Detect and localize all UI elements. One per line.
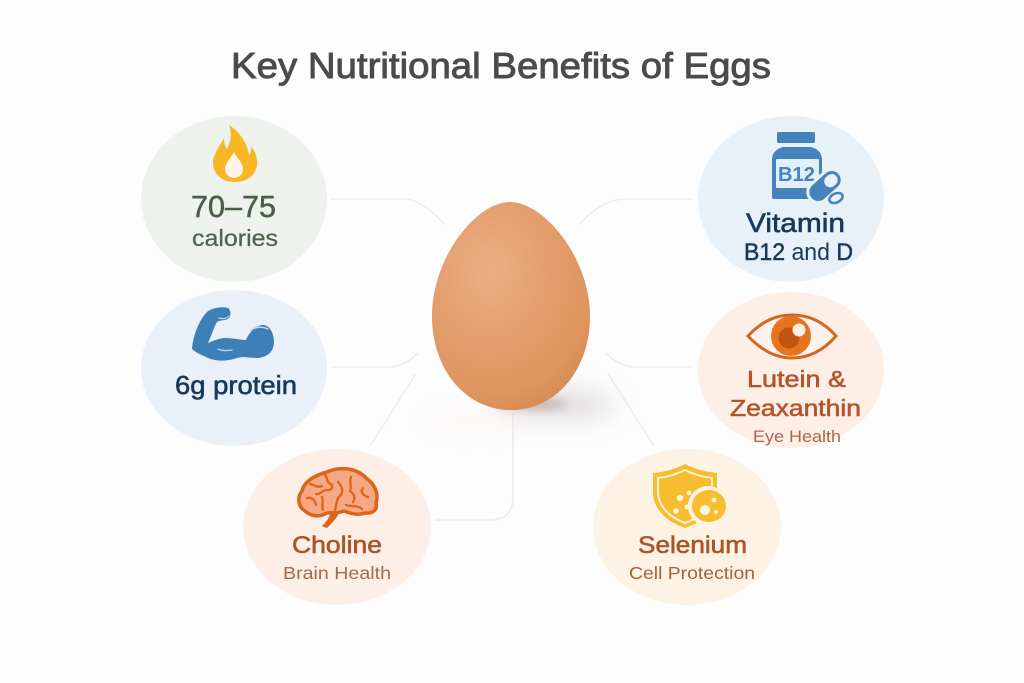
egg speckles: [432, 202, 590, 410]
sublabel: Eye Health: [753, 427, 841, 446]
label line 1: Lutein &: [747, 366, 846, 392]
panel: protein: [141, 290, 327, 446]
circle: [593, 449, 781, 605]
sublabel: Brain Health: [283, 563, 391, 583]
egg shell: [432, 202, 590, 410]
icon: B12 bottle and pills: B12: [778, 164, 815, 186]
label: Selenium: [638, 532, 747, 559]
circle: [698, 116, 884, 282]
icon: flexed arm: [192, 307, 274, 361]
label: 6g protein: [175, 370, 297, 400]
circle: [141, 290, 327, 446]
panel: lutein: [698, 292, 884, 448]
circle: [243, 449, 431, 605]
icon: brain: [299, 469, 377, 528]
egg shadow: [425, 389, 615, 432]
circle: [698, 292, 884, 448]
label line 2: Zeaxanthin: [730, 395, 861, 421]
central egg: [425, 202, 615, 432]
sublabel: Cell Protection: [629, 563, 755, 583]
icon: flame: [213, 125, 257, 182]
label line 1: Vitamin: [746, 208, 845, 238]
circle: [141, 116, 327, 282]
value: 70–75: [191, 189, 276, 224]
icon: shield and cell: [653, 464, 728, 528]
title: Key Nutritional Benefits of Eggs: [231, 45, 771, 86]
panel: calories: [141, 116, 327, 282]
label: Choline: [292, 532, 382, 559]
label: calories: [192, 225, 278, 251]
panel: vitamin: [698, 116, 884, 282]
panel: selenium: [593, 449, 781, 605]
connector lines: [331, 199, 692, 520]
icon: eye: [748, 315, 836, 358]
panel: choline: [243, 449, 431, 605]
label line 2: B12 and D: [744, 239, 853, 266]
icon: B12 bottle and pills: [772, 132, 849, 209]
